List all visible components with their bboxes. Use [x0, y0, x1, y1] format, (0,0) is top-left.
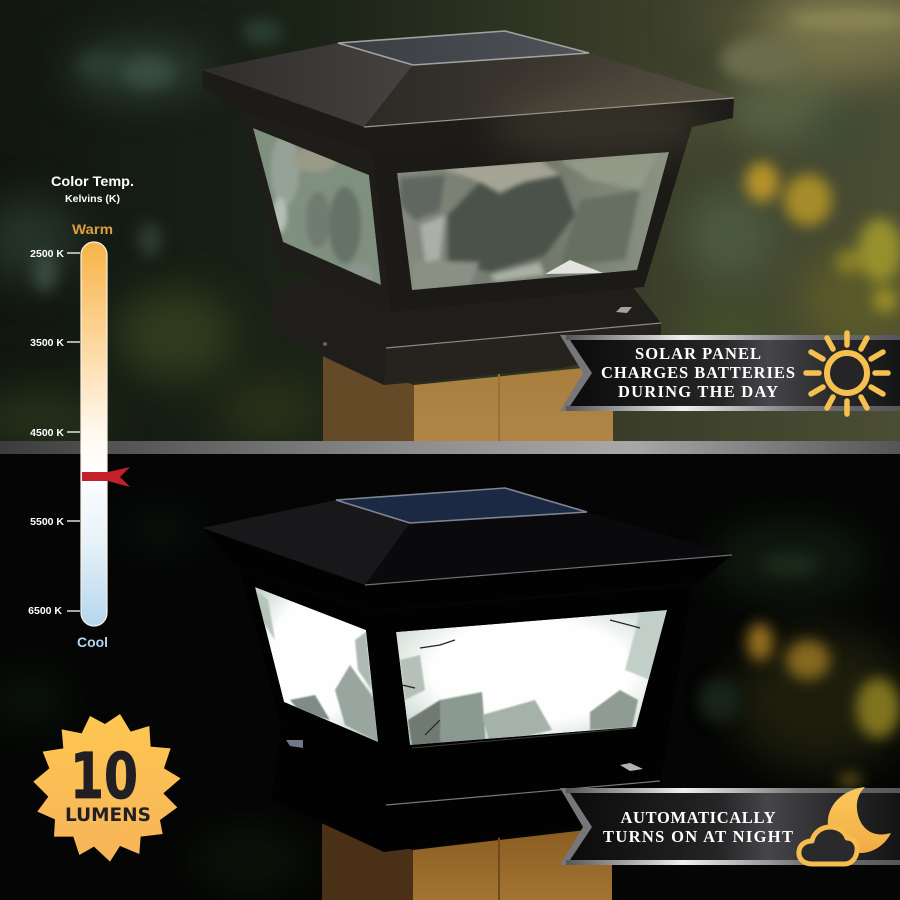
metallic divider between day and night	[0, 441, 900, 454]
lamp frame	[336, 127, 692, 288]
panel: daytime scene	[0, 0, 900, 450]
night front glass glowing	[396, 610, 667, 748]
top metal highlight	[566, 335, 900, 340]
banner text: DURING THE DAY	[618, 382, 778, 401]
ribbon metal border	[560, 335, 900, 411]
tick marks	[67, 253, 80, 611]
warm label: Warm	[72, 221, 113, 237]
night lamp body	[322, 817, 500, 852]
daytime blurred foliage background	[0, 0, 900, 450]
lamp base collar	[323, 288, 661, 385]
top metal highlight	[566, 788, 900, 793]
cool label: Cool	[77, 634, 108, 650]
bottom metal highlight	[566, 860, 900, 865]
tick labels: 6500 K	[28, 605, 62, 617]
banner text: AUTOMATICALLY	[620, 808, 776, 827]
panel: night scene	[0, 454, 900, 900]
night left glass glowing	[255, 587, 378, 742]
banner text: CHARGES BATTERIES	[601, 363, 795, 382]
tick labels: 4500 K	[30, 427, 64, 439]
banner text: SOLAR PANEL	[635, 344, 761, 363]
banner text: TURNS ON AT NIGHT	[603, 827, 793, 846]
bottom metal highlight	[566, 406, 900, 411]
number 10: 10	[70, 740, 138, 813]
panel: colour temperature scale	[28, 173, 134, 650]
icon: cloud	[799, 827, 857, 864]
ribbon dark body	[570, 340, 900, 406]
night blurred foliage background	[0, 502, 900, 900]
starburst	[33, 714, 181, 862]
banner text	[601, 344, 795, 401]
night wooden post	[322, 817, 612, 900]
tick labels: 3500 K	[30, 337, 64, 349]
daytime lamp	[202, 31, 734, 385]
tick labels	[28, 248, 64, 617]
sunlight haze over lamp	[490, 90, 710, 160]
badge: 10 lumens	[33, 714, 181, 862]
red marker arrow	[82, 467, 130, 487]
tick labels: 2500 K	[30, 248, 64, 260]
banner: solar charging	[560, 333, 900, 414]
scale title: Color Temp.	[51, 173, 134, 189]
lamp roof	[202, 31, 734, 152]
lumens label: LUMENS	[65, 804, 151, 826]
ribbon metal border	[560, 788, 900, 865]
night lamp roof	[202, 487, 732, 586]
icon: sun	[806, 333, 888, 414]
scale subtitle: Kelvins (K)	[65, 193, 120, 205]
night lamp base highlights	[286, 728, 660, 805]
icon: crescent moon	[828, 787, 891, 853]
daytime wooden post	[323, 355, 613, 441]
lamp front glass	[397, 150, 669, 292]
tick labels: 5500 K	[30, 516, 64, 528]
ribbon dark body	[570, 793, 900, 860]
lamp left glass	[253, 128, 381, 287]
banner text	[603, 808, 793, 846]
night lamp	[202, 488, 732, 852]
banner: night operation	[560, 787, 900, 865]
thermometer bar	[81, 242, 107, 626]
